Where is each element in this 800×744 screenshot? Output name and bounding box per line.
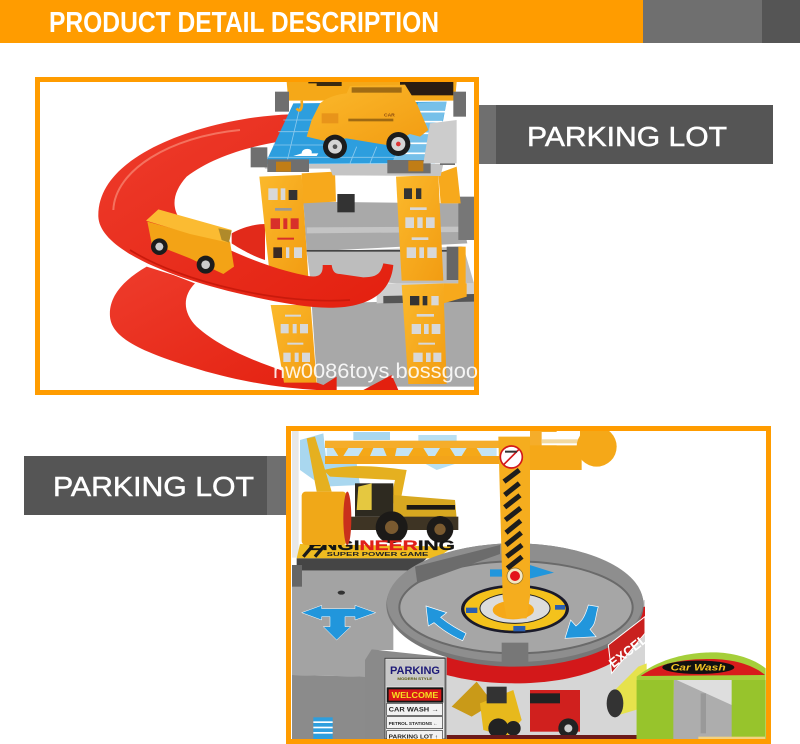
body art xyxy=(447,617,650,739)
back yellow structure xyxy=(287,82,457,101)
hazard strip and ledge xyxy=(297,544,453,571)
towers xyxy=(259,175,447,384)
turntable xyxy=(386,543,644,667)
sign heading: PARKING xyxy=(390,665,440,677)
icon: curved blue arrow left xyxy=(426,606,466,641)
panel: parking ramp photo xyxy=(38,80,476,392)
logo subtitle: SUPER POWER GAME xyxy=(327,552,429,558)
title: PRODUCT DETAIL DESCRIPTION xyxy=(49,7,439,39)
icon: yellow crane truck: CAR xyxy=(384,113,395,119)
label: parking lot top xyxy=(479,105,773,164)
panel: crane and turntable photo xyxy=(288,427,768,742)
icon: yellow dump truck xyxy=(146,209,234,274)
back towers xyxy=(302,167,467,303)
crane xyxy=(325,427,617,619)
label: parking lot top: PARKING LOT xyxy=(527,121,727,152)
blue deck xyxy=(265,102,447,164)
ring xyxy=(461,585,569,633)
watermark: hw0086toys.bossgoo xyxy=(273,359,478,383)
sign welcome: WELCOME xyxy=(392,690,439,700)
label: parking lot bottom: PARKING LOT xyxy=(53,471,254,502)
back red ramp segment xyxy=(232,224,265,260)
sign row petrol: PETROL STATIONS ← xyxy=(389,721,438,727)
excavator xyxy=(307,437,458,543)
sign row parking lot: PARKING LOT ↑ xyxy=(389,734,438,740)
background art xyxy=(292,431,497,558)
label: parking lot bottom xyxy=(24,456,286,515)
icon: curved blue arrow right xyxy=(565,605,598,638)
lower ramp xyxy=(110,267,337,390)
sign board xyxy=(365,649,447,741)
icon: T-shaped blue arrow xyxy=(302,605,376,640)
red cylinder band xyxy=(447,600,645,740)
gray base plate xyxy=(292,565,420,739)
engineering logo: ENGI NEER ING xyxy=(308,537,455,553)
car wash text: Car Wash xyxy=(671,663,726,673)
excavator bucket xyxy=(302,492,351,545)
car wash gate xyxy=(637,652,766,739)
header banner xyxy=(0,0,800,43)
stripes marking xyxy=(313,717,333,739)
icon: blue arrow top xyxy=(490,565,554,578)
upper ramp xyxy=(98,114,393,308)
icon: yellow crane truck xyxy=(297,83,428,159)
photo frame xyxy=(288,428,768,742)
photo frame xyxy=(38,80,476,392)
sign subtitle: MODERN STYLE xyxy=(397,676,433,681)
gray deck connectors xyxy=(251,92,466,176)
body art: EXCEL xyxy=(606,632,650,671)
sign row car wash: CAR WASH → xyxy=(389,707,439,714)
gray floors xyxy=(303,194,474,387)
